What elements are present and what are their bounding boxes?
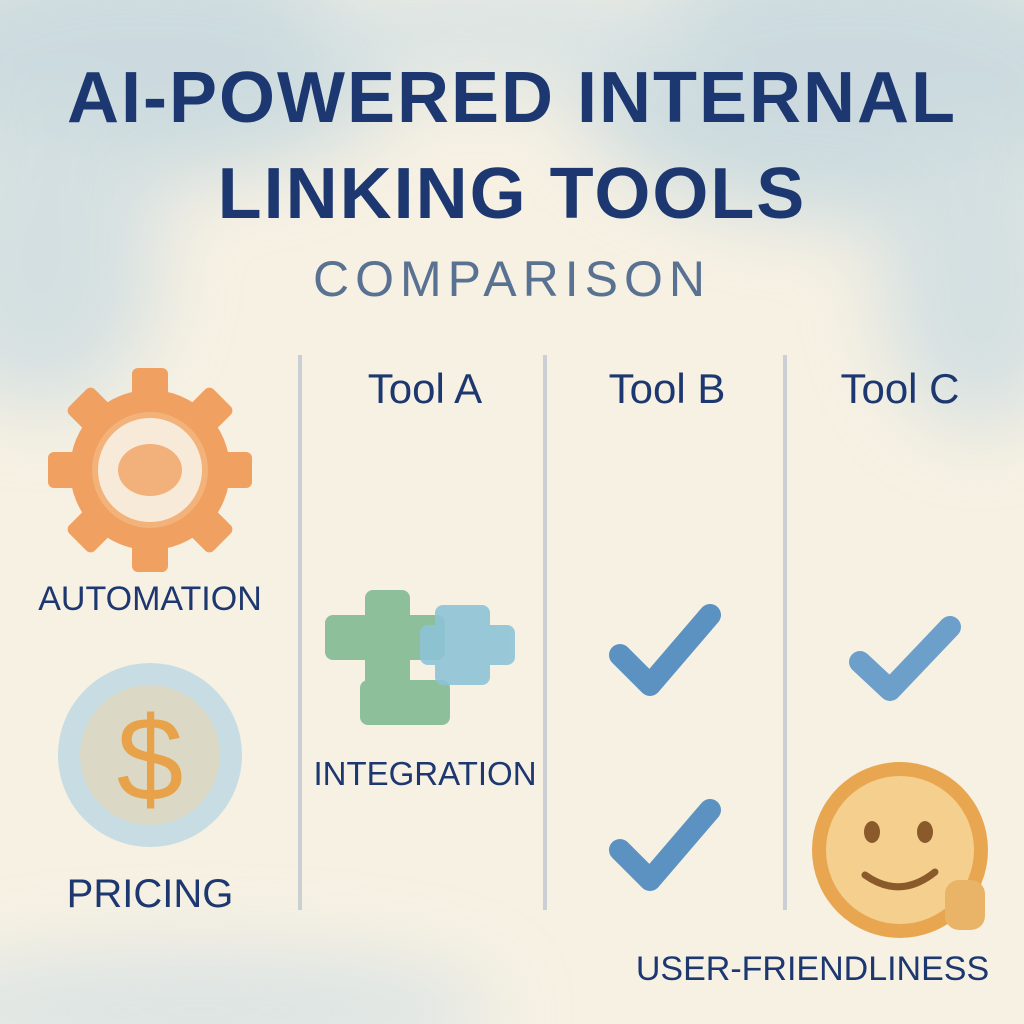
header: Tool C: Tool C bbox=[840, 365, 960, 412]
icon: gear bbox=[48, 368, 252, 572]
title: AI-POWERED INTERNAL bbox=[67, 58, 957, 138]
label: integration: INTEGRATION bbox=[313, 755, 537, 792]
icon: pricing coin: $ bbox=[117, 692, 183, 826]
label: automation: AUTOMATION bbox=[38, 580, 262, 618]
icon: integration puzzle bbox=[325, 590, 515, 725]
subtitle: COMPARISON bbox=[313, 251, 711, 307]
icon: check C1 bbox=[849, 616, 961, 701]
label: pricing: PRICING bbox=[67, 872, 233, 916]
header: Tool B: Tool B bbox=[609, 365, 725, 412]
icon: pricing coin bbox=[58, 663, 242, 847]
title: LINKING TOOLS bbox=[218, 154, 806, 234]
label: user-friendliness: USER-FRIENDLINESS bbox=[636, 950, 989, 988]
icon: smiley bbox=[812, 762, 988, 938]
icon: check B1 bbox=[609, 604, 721, 696]
header: Tool A: Tool A bbox=[368, 365, 482, 412]
title bbox=[67, 58, 957, 234]
icon: check B2 bbox=[609, 799, 721, 891]
